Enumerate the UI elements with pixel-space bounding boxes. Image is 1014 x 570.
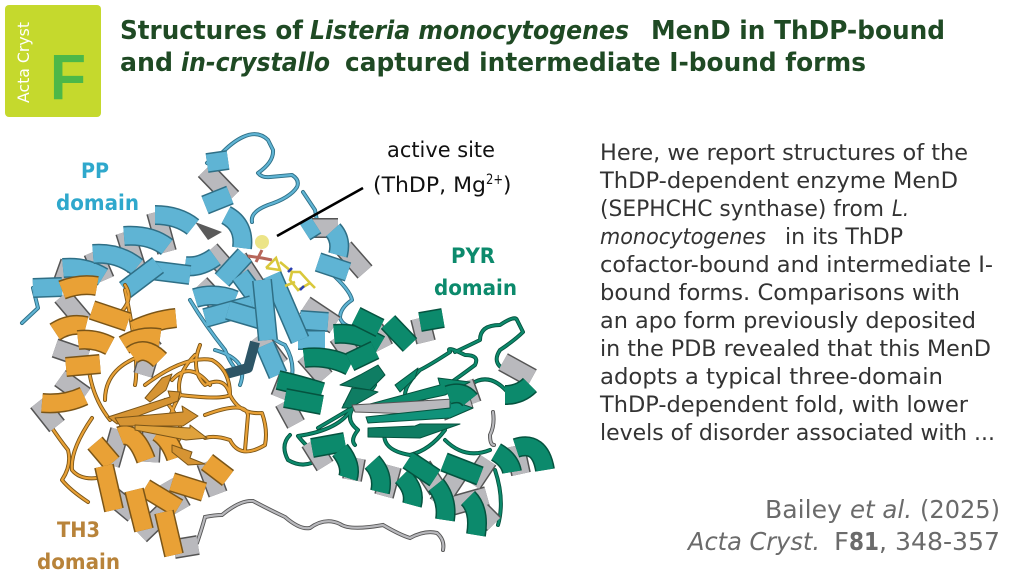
citation: Bailey (765, 495, 842, 524)
abstract text block: ThDP-dependent fold, with lower (599, 393, 969, 418)
abstract text block: cofactor-bound and intermediate I- (600, 253, 993, 278)
journal logo badge: F (50, 41, 86, 113)
citation: (2025) (920, 495, 1000, 524)
abstract text block: (SEPHCHC synthase) from (600, 197, 884, 222)
abstract text block: an apo form previously deposited (600, 309, 976, 334)
protein structure ribbon diagram (22, 134, 545, 555)
label: TH3 domain: TH3 (57, 518, 100, 543)
disordered linker (grey) (197, 412, 494, 550)
title: Structures of (120, 16, 304, 46)
citation: , 348-357 (879, 527, 1000, 556)
label: PP domain: PP (81, 159, 109, 184)
abstract text block: monocytogenes (600, 225, 766, 250)
citation: et al. (850, 495, 912, 524)
abstract text block: in its ThDP (785, 225, 903, 250)
label: active site: 2+ (486, 172, 503, 188)
title: MenD in ThDP-bound (651, 16, 945, 46)
callout line to active site (277, 188, 363, 236)
abstract text block: levels of disorder associated with ... (600, 421, 995, 446)
label: PYR domain: domain (434, 276, 517, 301)
citation: Acta Cryst. (686, 527, 820, 556)
citation: 81 (849, 527, 879, 556)
journal logo badge (5, 5, 101, 117)
label: PP domain: domain (56, 191, 139, 216)
title: and (120, 48, 173, 78)
abstract text block: ThDP-dependent enzyme MenD (599, 169, 958, 194)
title: Listeria monocytogenes (310, 16, 629, 46)
active site ligands: ThDP and Mg ion (248, 235, 315, 290)
title: captured intermediate I-bound forms (345, 48, 866, 78)
label: active site: ) (503, 173, 511, 198)
abstract text block: Here, we report structures of the (600, 141, 968, 166)
citation: F (834, 527, 849, 556)
abstract text block: L. (892, 197, 909, 222)
journal logo badge: Acta Cryst (14, 22, 33, 103)
PP domain ribbon (blue) (22, 134, 365, 395)
abstract text block: adopts a typical three-domain (600, 365, 943, 390)
label: active site: (ThDP, Mg (373, 173, 486, 198)
label: PYR domain: PYR (451, 244, 495, 269)
label: active site: active site (387, 138, 495, 163)
title: in-crystallo (181, 48, 330, 78)
TH3 domain ribbon (orange) (38, 285, 266, 555)
abstract text block: in the PDB revealed that this MenD (600, 337, 991, 362)
PYR domain ribbon (green) (278, 316, 545, 535)
abstract text block: bound forms. Comparisons with (600, 281, 960, 306)
